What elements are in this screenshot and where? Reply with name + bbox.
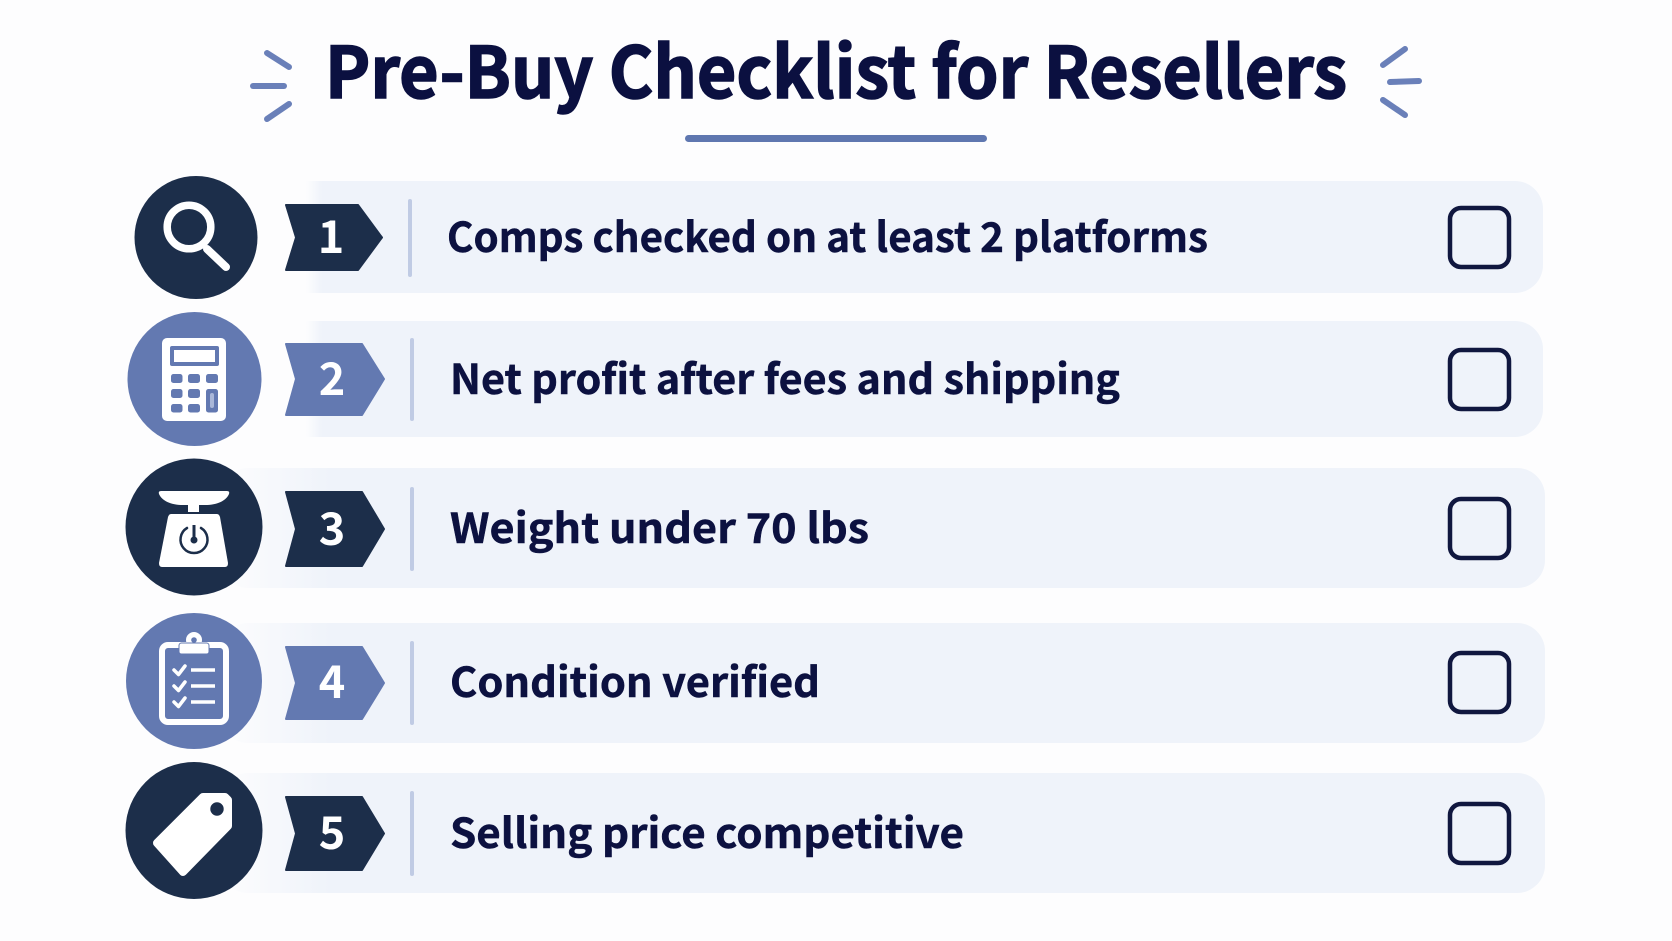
row 5 icon: price tag	[126, 762, 262, 899]
row 1 checkbox	[1450, 208, 1509, 267]
row 2 icon: calculator	[128, 312, 262, 446]
row 2 number badge	[286, 343, 384, 415]
row 1 number badge: 1	[318, 201, 344, 266]
row 4: condition	[126, 613, 1545, 749]
row 5 label: Selling price competitive	[450, 800, 964, 860]
title: Pre-Buy Checklist for Resellers	[325, 17, 1347, 119]
row 3 number badge	[286, 492, 384, 566]
row 2: net profit	[128, 312, 1543, 446]
row 1 number badge	[286, 201, 382, 270]
row 3: weight	[126, 458, 1545, 596]
row 3 number badge: 3	[319, 493, 345, 558]
row 2 label: Net profit after fees and shipping	[450, 346, 1120, 406]
row 3 checkbox	[1450, 499, 1509, 558]
row 3 panel	[220, 468, 1545, 588]
row 4 label: Condition verified	[450, 649, 820, 709]
row 1 label: Comps checked on at least 2 platforms	[447, 204, 1208, 264]
row 4 panel	[220, 623, 1545, 743]
title burst right	[1383, 49, 1419, 115]
row 2 number badge: 2	[319, 343, 345, 408]
row 2 panel	[306, 321, 1543, 437]
row 1: comps	[134, 176, 1543, 299]
row 4 number badge: 4	[319, 646, 345, 711]
row 1 panel	[306, 181, 1543, 293]
row 5 panel	[220, 773, 1545, 893]
row 4 checkbox	[1450, 653, 1509, 712]
row 5 number badge	[286, 797, 384, 870]
title underline	[685, 135, 987, 142]
row 5: selling price	[126, 762, 1545, 899]
row 3 icon: scale	[126, 458, 262, 596]
row 2 checkbox	[1450, 350, 1509, 409]
row 5 checkbox	[1450, 804, 1509, 863]
row 5 number badge: 5	[319, 797, 345, 862]
row 3 label: Weight under 70 lbs	[450, 495, 869, 555]
row 4 number badge	[286, 646, 384, 719]
title burst left	[253, 53, 289, 119]
row 4 icon: clipboard	[126, 613, 262, 749]
row 1 icon: magnifier	[134, 176, 258, 299]
